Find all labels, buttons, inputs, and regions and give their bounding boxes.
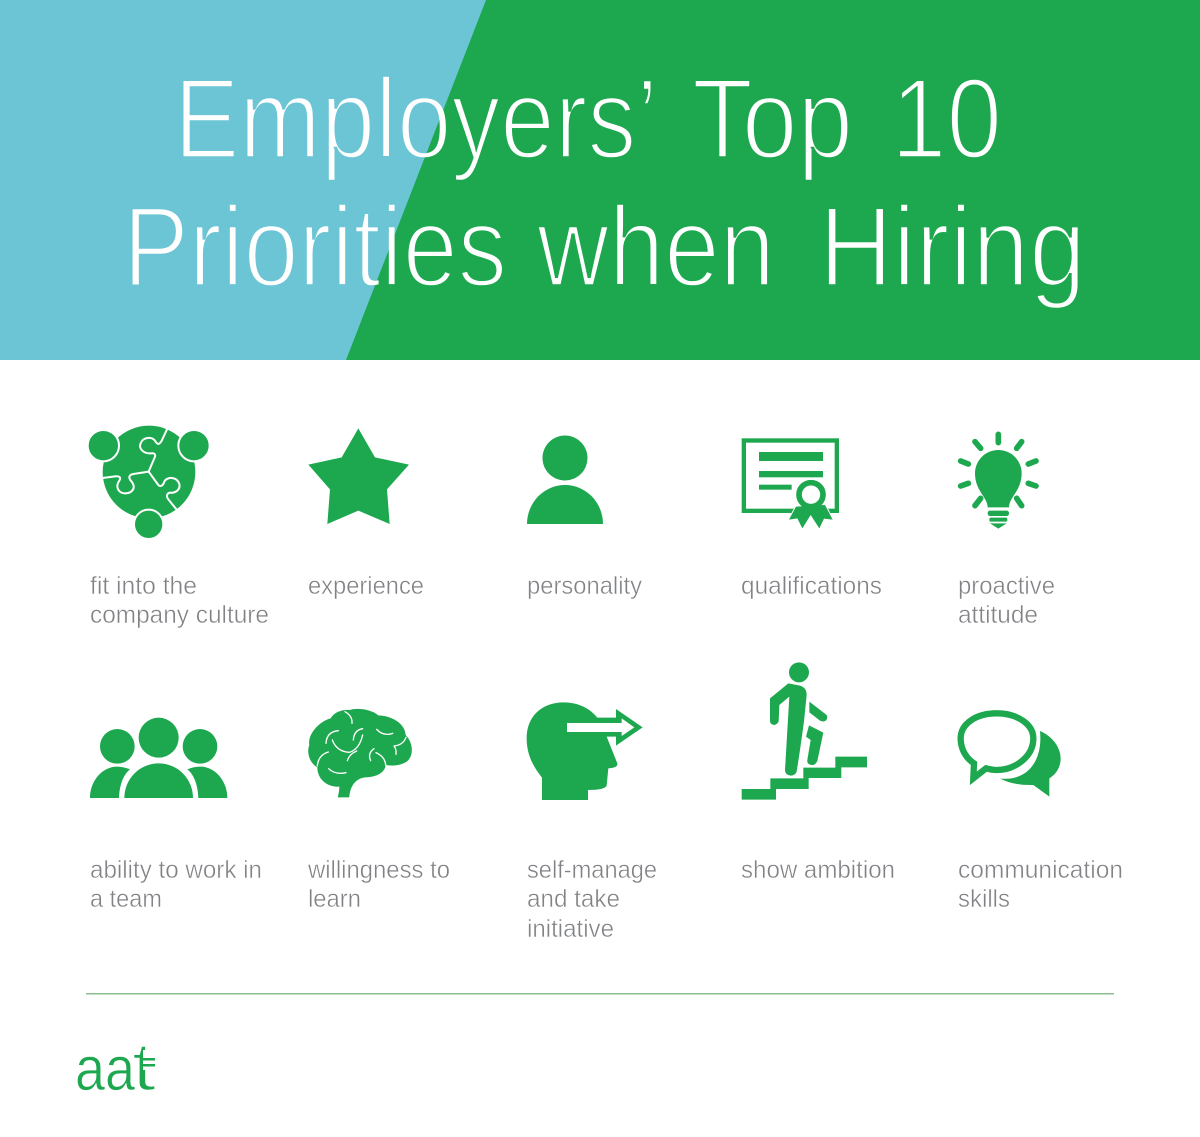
title: Hiring [819, 184, 1086, 311]
label: communication skills [958, 856, 1123, 913]
label: self-manage and take initiative: initiative [527, 915, 614, 943]
label: communication skills: skills [958, 885, 1010, 913]
logo: aat: t [132, 1029, 156, 1105]
icon: person [527, 436, 603, 524]
icon: head with arrow [527, 702, 643, 800]
label: show ambition: show ambition [741, 856, 895, 884]
label: proactive attitude: attitude [958, 601, 1038, 629]
icon: person climbing stairs [742, 662, 867, 800]
icon: speech bubbles [961, 713, 1061, 797]
title: 10 [891, 56, 1002, 183]
label: willingness to learn: willingness to [307, 856, 450, 884]
label: qualifications: qualifications [741, 572, 882, 600]
header banner [0, 0, 1200, 360]
icon: certificate [744, 440, 837, 528]
icon: light bulb [961, 434, 1036, 529]
label: willingness to learn [307, 856, 450, 913]
label: personality: personality [527, 572, 642, 600]
label: self-manage and take initiative: and take [527, 885, 620, 913]
logo: aat: aa [75, 1035, 135, 1104]
label: self-manage and take initiative [527, 856, 657, 943]
icon: star [308, 428, 409, 524]
label: communication skills: communication [958, 856, 1123, 884]
label: experience: experience [308, 572, 424, 600]
label: ability to work in a team: ability to work in [90, 856, 262, 884]
title [123, 56, 1086, 311]
icon: team [90, 718, 227, 798]
title: Top [692, 56, 853, 183]
label: proactive attitude: proactive [958, 572, 1055, 600]
label: fit into the company culture: company culture [90, 601, 269, 629]
icon: brain [308, 709, 412, 797]
icon: puzzle [88, 426, 210, 539]
title: Employers’ [174, 56, 658, 183]
label: self-manage and take initiative: self-manage [527, 856, 657, 884]
label: fit into the company culture: fit into the [90, 572, 197, 600]
title: when [536, 184, 775, 311]
label: willingness to learn: learn [308, 885, 361, 913]
label: ability to work in a team: a team [90, 885, 162, 913]
label: proactive attitude [958, 572, 1055, 629]
label: fit into the company culture [90, 572, 269, 629]
label: ability to work in a team [90, 856, 262, 913]
title: Priorities [123, 184, 507, 311]
